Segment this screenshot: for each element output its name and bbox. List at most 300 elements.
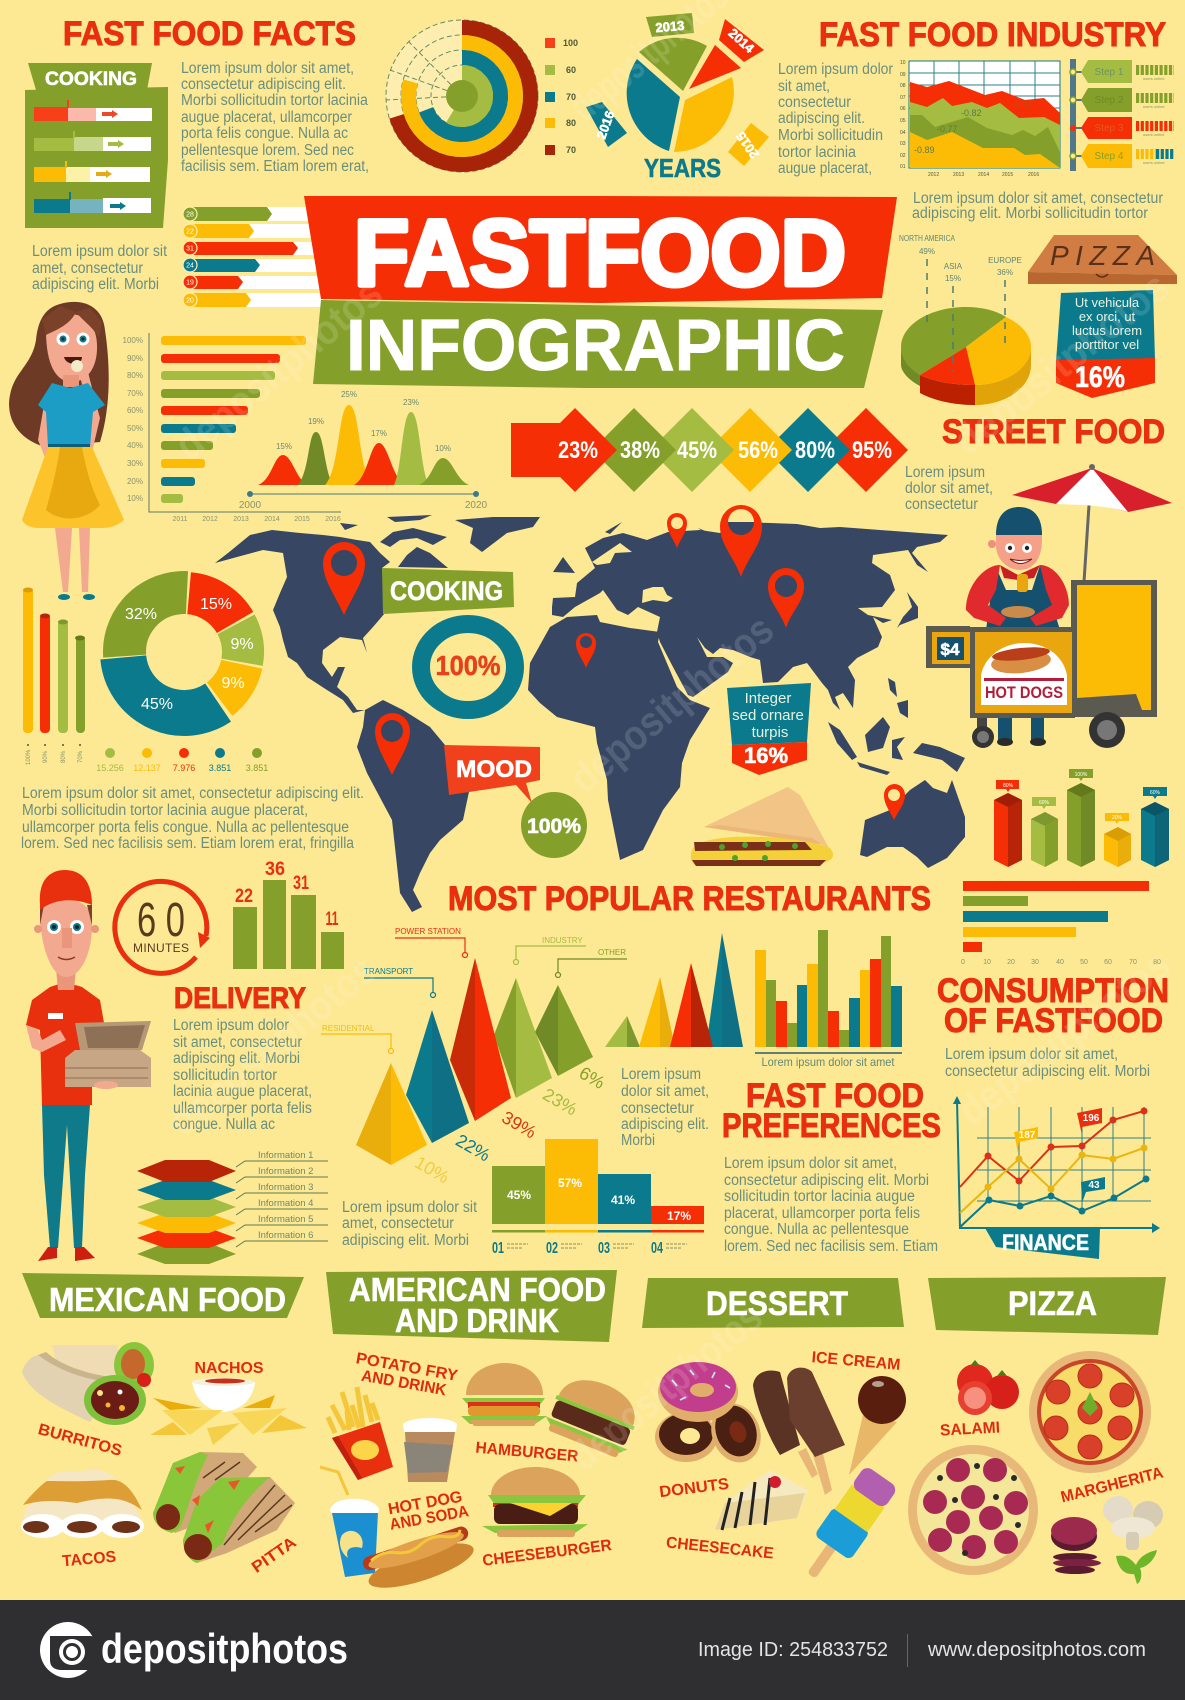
icon: pizza box xyxy=(1028,235,1177,284)
map: british isles and arctic russia xyxy=(553,522,715,573)
label: ice cream: ICE CREAM xyxy=(811,1349,901,1374)
text block: under stack: Lorem ipsum dolor sit xyxy=(342,1199,478,1216)
chart: stacked area: 09 xyxy=(900,72,906,78)
text block: restaurants: Lorem ipsum xyxy=(621,1066,701,1083)
chart: percentage arrows row: 80% xyxy=(795,437,835,464)
chart: consumption horizontal bars: 70 xyxy=(1129,959,1137,966)
legend: radial chart: 60 xyxy=(566,65,576,75)
chart: stacked area xyxy=(900,60,1060,178)
illustration: salami pizza xyxy=(908,1445,1038,1575)
banner: american food and drink xyxy=(326,1270,617,1342)
chart: four steps with people: Step 1 xyxy=(1095,67,1124,78)
chart: vertical tube bars: 90% xyxy=(43,750,49,763)
chart: percentage step bars: 45% xyxy=(507,1188,531,1202)
text block: street food: consectetur xyxy=(905,496,978,513)
label: potato fry and drink xyxy=(355,1350,459,1399)
legend: radial chart: 80 xyxy=(566,118,576,128)
chart: 3d pyramids with callouts: TRANSPORT xyxy=(364,967,413,976)
chart: bell curve mountains: 23% xyxy=(403,398,419,407)
footer url: www.depositphotos.com xyxy=(927,1639,1146,1661)
text block: street food: dolor sit amet, xyxy=(905,480,993,497)
chart: finance line chart: 187 xyxy=(1019,1130,1036,1141)
illustration: margherita pizza xyxy=(1029,1351,1151,1473)
chart: 3d pie regions: 15% xyxy=(945,274,961,283)
text block: restaurants: consectetur xyxy=(621,1100,694,1117)
chart: consumption horizontal bars: 20 xyxy=(1007,959,1015,966)
chart: arrow bars with numbers: 19 xyxy=(186,280,194,286)
text block: delivery: adipiscing elit. Morbi xyxy=(173,1050,300,1067)
callout: 16% tag: Ut vehicula xyxy=(1075,295,1140,310)
label: tacos: TACOS xyxy=(61,1549,117,1570)
text block: intro paragraph: Morbi sollicitudin tortor lacinia xyxy=(181,92,368,109)
heading: most popular restaurants: MOST POPULAR RESTAURANTS xyxy=(448,880,931,918)
illustration: hot dog vendor and cart: $4 xyxy=(941,640,960,659)
chart: arrow bars with numbers: 20 xyxy=(186,298,194,304)
label: cheeseburger: CHEESEBURGER xyxy=(482,1537,613,1570)
label: pitta: PITTA xyxy=(249,1534,300,1577)
legend: donut values: 12.137 xyxy=(133,763,161,773)
chart: 3d pyramids with callouts: RESIDENTIAL xyxy=(322,1024,375,1033)
chart: 100% ring: 100% xyxy=(436,650,501,681)
chart: percentage step bars: 57% xyxy=(558,1176,582,1190)
chart: delivery bars: 22 xyxy=(235,886,253,907)
chart: donut: 9% xyxy=(221,675,245,692)
label: salami: SALAMI xyxy=(940,1419,1000,1440)
text block: intro paragraph: facilisis sem. Etiam lorem erat, xyxy=(181,158,369,175)
callout: 16% tag: luctus lorem xyxy=(1072,323,1142,338)
chart: four steps with people: users online xyxy=(1143,132,1165,137)
text block: delivery: ullamcorper porta felis xyxy=(173,1100,312,1117)
text block: industry paragraph: augue placerat, xyxy=(778,160,872,177)
text block: under stack: amet, consectetur xyxy=(342,1215,454,1232)
chart: four steps with people xyxy=(1070,59,1174,171)
chart: bell curve mountains: 2000 xyxy=(239,500,262,511)
callout: cooking label: COOKING xyxy=(390,576,503,606)
chart: percentage arrows row: 38% xyxy=(620,437,660,464)
watermarks: depositphotos xyxy=(160,945,385,1145)
banner: mexican food: MEXICAN FOOD xyxy=(49,1281,286,1318)
label: potato fry and drink: AND DRINK xyxy=(360,1368,448,1399)
banner: pizza xyxy=(928,1277,1166,1335)
heading: consumption of fastfood: OF FASTFOOD xyxy=(944,1002,1163,1040)
text block: intro paragraph: consectetur adipiscing elit. xyxy=(181,76,346,93)
illustration: hot dog xyxy=(361,1524,478,1597)
callout: mood label: MOOD xyxy=(456,756,532,783)
chart: horizontal percentage bars: 2013 xyxy=(233,516,249,523)
text block: industry paragraph: sit amet, xyxy=(778,78,830,95)
chart: donut xyxy=(99,567,269,737)
chart: arrow bars with numbers: 31 xyxy=(186,246,194,252)
map pin: south america xyxy=(375,713,410,775)
chart: layered hexagon stack xyxy=(137,1150,328,1264)
legend: radial chart: 100 xyxy=(563,38,578,48)
text block: preferences: congue. Nulla ac pellentesque xyxy=(724,1221,909,1238)
chart: four steps with people: users online xyxy=(1143,76,1165,81)
chart: 3d pie regions: 36% xyxy=(997,268,1013,277)
chart: percentage step bars: 01 xyxy=(492,1240,504,1257)
label: potato fry and drink: POTATO FRY xyxy=(355,1350,459,1385)
illustration: hot dog vendor and cart: HOT DOGS xyxy=(985,683,1063,702)
text block: industry paragraph: consectetur xyxy=(778,94,851,111)
text block: delivery: sollicitudin tortor xyxy=(173,1067,277,1084)
callout: integer tag: turpis xyxy=(752,724,788,741)
chart: stacked area: -0.77 xyxy=(937,124,958,134)
callout: integer tag xyxy=(727,683,811,775)
illustration: enchilada tacos xyxy=(20,1470,144,1538)
map pin: africa xyxy=(576,633,596,668)
chart: isometric bars: 80% xyxy=(1003,783,1014,789)
chart: horizontal percentage bars: 100% xyxy=(123,336,143,345)
callout: finance ribbon: FINANCE xyxy=(1002,1230,1089,1255)
chart: years exploded pie: 2015 xyxy=(733,129,762,161)
chart: isometric bars: 100% xyxy=(1075,772,1088,778)
chart: stacked area: 08 xyxy=(900,83,906,89)
icon: footer camera logo xyxy=(40,1622,96,1678)
chart: finance line chart: 43 xyxy=(1088,1180,1100,1191)
chart: percentage step bars: 04 xyxy=(651,1240,663,1257)
chart: 3d pie regions: 49% xyxy=(919,247,935,256)
chart: finance line chart xyxy=(953,1096,1160,1233)
chart: isometric bars: 20% xyxy=(1112,815,1123,821)
chart: 3d pyramids with callouts: 22% xyxy=(452,1130,494,1165)
chart: 100% green circle xyxy=(521,792,587,858)
illustration: fries xyxy=(328,1387,393,1480)
chart: consumption horizontal bars: 50 xyxy=(1080,959,1088,966)
chart: donut: 15% xyxy=(200,596,232,613)
illustration: soda cup xyxy=(320,1467,379,1577)
illustration: woman eating ice cream xyxy=(9,302,124,600)
text block: under cooking: adipiscing elit. Morbi xyxy=(32,276,159,293)
chart: percentage step bars: 17% xyxy=(667,1209,691,1223)
footer bar xyxy=(0,1600,1185,1700)
chart: stacked area: 2014 xyxy=(978,172,989,178)
chart: consumption horizontal bars: 0 xyxy=(961,959,965,966)
callout: finance ribbon xyxy=(985,1228,1100,1259)
chart: four steps with people: Step 4 xyxy=(1095,151,1124,162)
chart: percentage step bars: 41% xyxy=(611,1193,635,1207)
chart: years exploded pie xyxy=(586,13,769,183)
chart: grouped column bars: Lorem ipsum dolor sit amet xyxy=(762,1055,895,1069)
callout: 16% tag xyxy=(1056,290,1155,398)
chart: percentage arrows row xyxy=(511,408,908,492)
footer brand name: depositphotos xyxy=(101,1625,348,1672)
chart: vertical tube bars: 80% xyxy=(61,750,67,763)
label: hot dog and soda: AND SODA xyxy=(388,1503,471,1534)
chart: layered hexagon stack: Information 6 xyxy=(258,1230,313,1241)
watermarks: depositphotos xyxy=(561,605,782,802)
chart: four steps with people: Step 3 xyxy=(1095,123,1124,134)
banner: pizza: PIZZA xyxy=(1008,1285,1097,1323)
chart: years exploded pie: 2014 xyxy=(726,25,758,56)
text block: preferences xyxy=(724,1155,938,1255)
banner: dessert xyxy=(642,1278,904,1328)
text block: delivery: lacinia augue placerat, xyxy=(173,1083,312,1100)
text block: under the industry chart xyxy=(912,190,1163,222)
chart: percentage arrows row: 56% xyxy=(738,437,778,464)
map: south america xyxy=(357,700,470,912)
text block: restaurants xyxy=(621,1066,709,1149)
chart: 3d pie regions: ASIA xyxy=(944,262,963,271)
map pin: russia xyxy=(720,505,762,577)
legend: radial chart: 70 xyxy=(566,145,576,155)
chart: consumption horizontal bars: 40 xyxy=(1056,959,1064,966)
chart: delivery bars xyxy=(233,859,344,969)
chart: stacked area: 02 xyxy=(900,153,906,159)
chart: stacked area: 2015 xyxy=(1002,172,1013,178)
chart: stacked area: 06 xyxy=(900,106,906,112)
chart: consumption horizontal bars: 30 xyxy=(1031,959,1039,966)
chart: bell curve mountains: 17% xyxy=(371,429,387,438)
illustration: second hamburger xyxy=(541,1368,647,1461)
chart: percentage step bars: 02 xyxy=(546,1240,558,1257)
illustration: pitta xyxy=(153,1452,295,1563)
heading: delivery: DELIVERY xyxy=(174,982,306,1015)
watermarks: depositphotos xyxy=(166,269,391,469)
chart: 3d pyramids with callouts: 23% xyxy=(539,1084,581,1119)
map: asian islands xyxy=(828,592,965,775)
icon: 60 minutes timer xyxy=(115,881,210,973)
chart: 3d pyramids with callouts xyxy=(321,927,627,1187)
chart: years exploded pie: 2016 xyxy=(594,109,618,141)
illustration: ice cream cone xyxy=(849,1376,906,1475)
text block: under cooking xyxy=(32,243,168,293)
map: australia xyxy=(860,780,965,868)
chart: delivery bars: 11 xyxy=(326,909,339,930)
chart: layered hexagon stack: Information 3 xyxy=(258,1182,313,1193)
chart: percentage arrows row: 45% xyxy=(677,437,717,464)
chart: horizontal percentage bars: 70% xyxy=(127,389,143,398)
chart: years exploded pie: 2013 xyxy=(655,18,685,35)
legend: donut values: 3.851 xyxy=(209,763,231,773)
chart: 3d pyramids with callouts: 6% xyxy=(576,1063,608,1093)
chart: donut: 32% xyxy=(125,606,157,623)
text block: intro paragraph: porta felis congue. Nulla ac xyxy=(181,125,348,142)
chart: bell curve mountains: 25% xyxy=(341,390,357,399)
map pin: europe xyxy=(667,513,687,548)
text block: consumption: Lorem ipsum dolor sit amet, xyxy=(945,1046,1118,1063)
text block: restaurants: adipiscing elit. xyxy=(621,1116,709,1133)
callout: 16% tag: ex orci, ut xyxy=(1079,309,1136,324)
text block: under cooking: Lorem ipsum dolor sit xyxy=(32,243,168,260)
chart: stacked area: 2013 xyxy=(953,172,964,178)
banner: dessert: DESSERT xyxy=(706,1285,848,1323)
chart: stacked area: 05 xyxy=(900,118,906,124)
callout: 16% tag: porttitor vel xyxy=(1075,337,1139,352)
chart: 100% green circle: 100% xyxy=(527,815,581,838)
chart: vertical tube bars: 70% xyxy=(78,750,84,763)
text block: left paragraph under donut: lorem. Sed nec facilisis sem. Etiam lorem erat, fringilla xyxy=(21,835,354,852)
callout: mood label xyxy=(444,745,540,803)
callout: integer tag: sed ornare xyxy=(732,707,804,724)
chart: horizontal percentage bars: 90% xyxy=(127,354,143,363)
text block: intro paragraph xyxy=(181,60,369,175)
text block: left paragraph under donut: ullamcorper porta felis congue. Nulla ac pellentesque xyxy=(22,819,349,836)
banner: american food and drink: AND DRINK xyxy=(395,1302,559,1339)
chart: consumption horizontal bars: 10 xyxy=(983,959,991,966)
text block: left paragraph under donut: Morbi sollicitudin tortor lacinia augue placerat, xyxy=(22,802,308,819)
text block: under the industry chart: Lorem ipsum dolor sit amet, consectetur xyxy=(913,190,1163,207)
chart: layered hexagon stack: Information 4 xyxy=(258,1198,313,1209)
chart: horizontal percentage bars: 40% xyxy=(127,441,143,450)
text block: restaurants: dolor sit amet, xyxy=(621,1083,709,1100)
text block: industry paragraph xyxy=(778,61,893,177)
title banner: fastfood: FASTFOOD xyxy=(354,200,846,305)
heading: fast food preferences: PREFERENCES xyxy=(722,1107,941,1145)
legend: radial chart: 70 xyxy=(566,92,576,102)
chart: triangle peaks xyxy=(605,933,743,1047)
text block: preferences: lorem. Sed nec facilisis sem. Etiam xyxy=(724,1238,938,1255)
label: hamburger: HAMBURGER xyxy=(475,1440,579,1465)
chart: horizontal percentage bars: 2015 xyxy=(294,516,310,523)
callout: cooking label xyxy=(382,568,514,614)
chart: 3d pie regions: EUROPE xyxy=(988,256,1022,265)
icon: 60 minutes timer: MINUTES xyxy=(133,941,189,955)
chart: layered hexagon stack: Information 5 xyxy=(258,1214,313,1225)
chart: delivery bars: 36 xyxy=(265,859,285,880)
footer image id: Image ID: 254833752 xyxy=(698,1639,888,1661)
legend: radial chart xyxy=(545,38,578,155)
text block: preferences: consectetur adipiscing elit. Morbi xyxy=(724,1172,929,1189)
map seas cutouts xyxy=(592,543,673,603)
chart: arrow bars with numbers: 28 xyxy=(186,212,194,218)
label: donuts: DONUTS xyxy=(658,1476,730,1501)
heading: fast food preferences xyxy=(722,1077,941,1145)
text block: preferences: placerat, ullamcorper porta felis xyxy=(724,1205,920,1222)
illustration: quesadilla xyxy=(691,787,833,866)
chart: 3d pyramids with callouts: 39% xyxy=(498,1107,540,1142)
chart: finance line chart: 196 xyxy=(1083,1113,1100,1124)
chart: horizontal percentage bars: 20% xyxy=(127,477,143,486)
chart: isometric bars xyxy=(994,769,1169,867)
text block: intro paragraph: augue placerat, ullamcorper xyxy=(181,109,352,126)
heading: fast food facts: FAST FOOD FACTS xyxy=(63,15,356,53)
chart: percentage arrows row: 23% xyxy=(558,437,598,464)
text block: intro paragraph: Lorem ipsum dolor sit amet, xyxy=(181,60,354,77)
chart: stacked area: 2016 xyxy=(1028,172,1039,178)
text block: preferences: sollicitudin tortor lacinia augue xyxy=(724,1188,915,1205)
text block: under cooking: amet, consectetur xyxy=(32,260,143,277)
heading: street food: STREET FOOD xyxy=(942,413,1165,451)
chart: isometric bars: 60% xyxy=(1039,800,1050,806)
illustration: mushrooms xyxy=(1103,1496,1163,1550)
illustration: hamburger xyxy=(461,1363,547,1426)
chart: stacked area: 01 xyxy=(900,164,906,170)
chart: percentage arrows row: 95% xyxy=(852,437,892,464)
illustration: burrito xyxy=(22,1342,154,1425)
map pin: asia xyxy=(768,568,804,628)
chart: radial progress rings xyxy=(386,20,538,172)
label: hot dog and soda: HOT DOG xyxy=(387,1489,464,1518)
illustration: hot dog vendor and cart xyxy=(926,464,1172,748)
chart: horizontal percentage bars: 30% xyxy=(127,459,143,468)
chart: arrow bars with numbers xyxy=(183,207,322,307)
chart: stacked area: 07 xyxy=(900,95,906,101)
chart: horizontal percentage bars: 50% xyxy=(127,424,143,433)
illustration: coffee cup xyxy=(403,1418,457,1482)
icon: 60 minutes timer: 6 0 xyxy=(137,894,185,947)
chart: bell curve mountains: 10% xyxy=(435,444,451,453)
chart: stacked area: 10 xyxy=(900,60,906,66)
chart: bell curve mountains: 15% xyxy=(276,442,292,451)
chart: arrow bars with numbers: 22 xyxy=(186,228,194,236)
chart: years exploded pie: YEARS xyxy=(644,153,721,183)
chart: four steps with people: Step 2 xyxy=(1095,95,1124,106)
text block: delivery xyxy=(173,1017,312,1133)
label: hot dog and soda xyxy=(387,1489,471,1534)
text block: under the industry chart: adipiscing elit. Morbi sollicitudin tortor xyxy=(912,205,1148,222)
text block: industry paragraph: Lorem ipsum dolor xyxy=(778,61,893,78)
chart: horizontal percentage bars xyxy=(123,333,341,523)
panel: cooking syringes xyxy=(25,63,168,228)
chart: percentage step bars xyxy=(492,1139,704,1257)
title banner: infographic: INFOGRAPHIC xyxy=(346,306,845,386)
callout: 16% tag: 16% xyxy=(1075,361,1125,394)
text block: industry paragraph: tortor lacinia xyxy=(778,144,856,161)
chart: isometric bars: 60% xyxy=(1150,790,1161,796)
chart: grouped column bars xyxy=(755,930,902,1069)
chart: horizontal percentage bars: 60% xyxy=(127,406,143,415)
text block: industry paragraph: adipiscing elit. xyxy=(778,110,865,127)
label: margherita: MARGHERITA xyxy=(1059,1464,1166,1506)
world map xyxy=(215,515,965,912)
illustration: cheesecake xyxy=(715,1470,808,1530)
chart: arrow bars with numbers: 24 xyxy=(186,262,194,270)
legend: donut values: 3.851 xyxy=(246,763,268,773)
text block: preferences: Lorem ipsum dolor sit amet, xyxy=(724,1155,897,1172)
chart: bell curve mountains: 2020 xyxy=(465,500,488,511)
chart: delivery bars: 31 xyxy=(293,873,309,894)
illustration: chocolate ice bars xyxy=(753,1368,845,1495)
text block: street food: Lorem ipsum xyxy=(905,464,985,481)
chart: consumption horizontal bars: 60 xyxy=(1104,959,1112,966)
chart: vertical tube bars xyxy=(23,588,85,765)
illustration: donuts xyxy=(655,1362,769,1469)
illustration: nachos xyxy=(150,1378,307,1445)
text block: consumption xyxy=(945,1046,1150,1080)
callout: integer tag: Integer xyxy=(745,690,791,707)
map: north america xyxy=(215,530,390,713)
watermarks xyxy=(160,0,1178,1480)
map pin: australia xyxy=(884,784,905,820)
map: eurasia xyxy=(552,522,948,710)
chart: 3d pyramids with callouts: OTHER xyxy=(598,948,626,957)
panel: cooking syringes: COOKING xyxy=(45,69,137,90)
illustration: cheeseburger xyxy=(482,1467,588,1537)
map pin: north america xyxy=(323,542,365,615)
label: nachos: NACHOS xyxy=(194,1360,264,1377)
chart: stacked area: 03 xyxy=(900,141,906,147)
text block: delivery: congue. Nulla ac xyxy=(173,1116,275,1133)
chart: 3d pie regions: NORTH AMERICA xyxy=(899,234,956,243)
text block: delivery: sit amet, consectetur xyxy=(173,1034,302,1051)
chart: donut: 45% xyxy=(141,696,173,713)
chart: four steps with people: users online xyxy=(1143,160,1165,165)
heading: fast food preferences: FAST FOOD xyxy=(746,1077,924,1115)
chart: consumption horizontal bars xyxy=(961,881,1161,966)
chart: donut: 9% xyxy=(230,636,254,653)
chart: 100% ring xyxy=(421,624,515,710)
chart: 3d pyramids with callouts: POWER STATION xyxy=(395,927,461,936)
text block: consumption: consectetur adipiscing elit. Morbi xyxy=(945,1063,1150,1080)
legend: donut values: 15.256 xyxy=(96,763,124,773)
chart: horizontal percentage bars: 2012 xyxy=(202,516,218,523)
chart: stacked area: 2012 xyxy=(928,172,939,178)
chart: horizontal percentage bars: 10% xyxy=(127,494,143,503)
chart: layered hexagon stack: Information 1 xyxy=(258,1150,313,1161)
illustration: tomatoes xyxy=(957,1360,1019,1415)
illustration: salami slices xyxy=(1051,1517,1101,1574)
icon: pizza box: PIZZA xyxy=(1050,240,1155,271)
